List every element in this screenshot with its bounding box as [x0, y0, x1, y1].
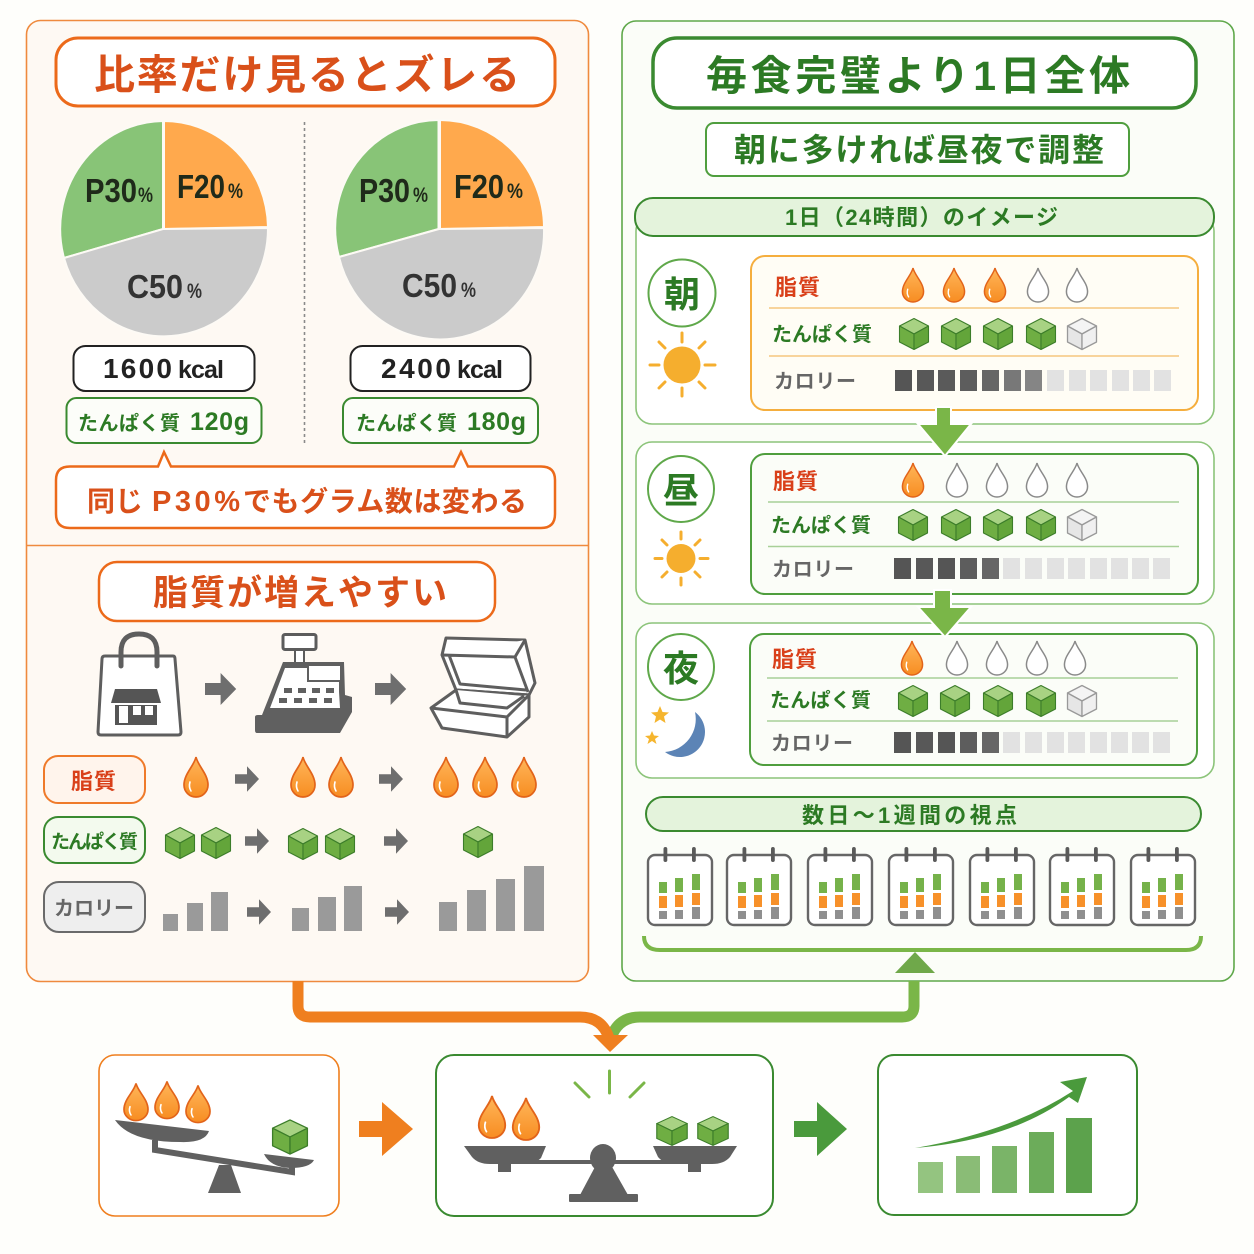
pie chart: 2400 kcal: F20: [454, 168, 504, 205]
panel: whole-day view: [622, 21, 1234, 981]
label: protein 180g: たんぱく質: [356, 412, 457, 435]
heading: whole day over each meal: [653, 38, 1196, 108]
label: protein 120g: [66, 398, 262, 443]
header: days to one week view: [646, 797, 1201, 831]
callout: same P30 differs in grams: でもグラム数は変わる: [243, 485, 527, 517]
panel: growth chart: [878, 1055, 1137, 1215]
card: night intake: カロリー: [771, 733, 853, 755]
pie chart: 1600 kcal: [60, 121, 268, 336]
arrowhead: week to balance: [895, 952, 935, 973]
connector: green path to balance: [611, 981, 914, 1038]
panel: unbalanced scale: [99, 1055, 339, 1216]
pie chart: 2400 kcal: %: [461, 279, 476, 302]
pie chart: 1600 kcal: %: [228, 180, 243, 203]
card: night intake: たんぱく質: [770, 689, 871, 712]
label: 2400 kcal: kcal: [457, 356, 503, 384]
card: morning intake: カロリー: [774, 371, 856, 393]
callout: same P30 differs in grams: P30%: [152, 486, 240, 518]
pie chart: 1600 kcal: %: [138, 184, 153, 207]
label: protein 120g: 120g: [190, 408, 249, 436]
card: noon intake: [751, 454, 1198, 594]
connector: orange path to balance: [298, 981, 628, 1052]
arrow: unbalanced to balanced: [359, 1102, 413, 1156]
arrow: bag to register: [205, 673, 236, 705]
pie chart: 1600 kcal: C50: [127, 268, 183, 305]
fat level: 3 of 5: [902, 268, 1088, 302]
section: night: [636, 623, 1214, 778]
label: 2400 kcal: [350, 346, 530, 391]
panel: balanced scale: [436, 1055, 773, 1216]
label: protein 180g: 180g: [467, 408, 526, 436]
row: protein label: たんぱく質: [51, 831, 138, 853]
calorie level: 5 of 13: [894, 732, 1170, 753]
badge: noon: [648, 456, 714, 522]
header: 24 hour image: [635, 198, 1214, 236]
card: morning intake: 脂質: [775, 275, 820, 300]
pie chart: 1600 kcal: P30: [85, 172, 137, 209]
fat level: 1 of 5: [901, 641, 1086, 675]
fat level: 1 of 5: [902, 463, 1088, 497]
icon: takeout box: [431, 638, 535, 737]
card: morning intake: [751, 256, 1198, 410]
pie chart: 1600 kcal: %: [187, 280, 202, 303]
subheading: adjust at lunch and dinner: 朝に多ければ昼夜で調整: [734, 132, 1104, 168]
callout: same P30 differs in grams: [56, 452, 555, 528]
pie chart: 2400 kcal: P30: [359, 172, 410, 209]
card: noon intake: たんぱく質: [771, 514, 871, 537]
heading: ratio alone misleads: [56, 38, 555, 106]
label: 1600 kcal: [74, 346, 254, 391]
heading: ratio alone misleads: 比率だけ見るとズレる: [94, 52, 520, 98]
arrow: rising trend: [915, 1077, 1087, 1148]
icon: cash register: [255, 634, 352, 733]
icon: store bag: [98, 634, 181, 735]
row: protein cubes decrease: [166, 826, 492, 860]
label: 2400 kcal: 2400: [381, 353, 451, 384]
icons: seven daily calendars: [648, 847, 1195, 925]
icon: sun: [650, 333, 715, 396]
row: calorie label: カロリー: [54, 898, 134, 920]
card: night intake: 脂質: [772, 647, 817, 672]
panel: ratio and convenience food: [26, 20, 588, 982]
label: 1600 kcal: kcal: [178, 356, 224, 384]
bracket: week total: [644, 936, 1201, 950]
arrow: morning to noon: [918, 407, 971, 456]
calorie level: 7 of 13: [895, 370, 1171, 391]
card: night intake: [750, 634, 1197, 765]
protein level: 4 of 5: [900, 318, 1096, 350]
pie chart: 2400 kcal: %: [507, 180, 523, 203]
protein level: 4 of 5: [898, 510, 1096, 540]
row: fat label: [44, 756, 145, 803]
pie chart: 1600 kcal: F20: [177, 168, 225, 205]
section: noon: [636, 442, 1214, 604]
header: days to one week view: 数日～1週間の視点: [802, 803, 1017, 828]
pie chart: 2400 kcal: %: [413, 184, 428, 207]
heading: fat tends to rise: [99, 562, 495, 621]
heading: fat tends to rise: 脂質が増えやすい: [153, 574, 447, 613]
badge: night: 夜: [663, 648, 699, 689]
badge: night: [648, 634, 714, 700]
row: fat drops increase: [184, 757, 536, 797]
calorie level: 5 of 13: [894, 558, 1170, 579]
callout: same P30 differs in grams: 同じ: [87, 486, 143, 517]
pie chart: 2400 kcal: C50: [402, 267, 457, 304]
row: calorie label: [44, 882, 145, 932]
heading: whole day over each meal: 毎食完璧より1日全体: [706, 53, 1130, 99]
badge: morning: 朝: [664, 274, 700, 315]
icon: moon and stars: [645, 706, 705, 757]
protein level: 4 of 5: [898, 686, 1096, 716]
header: 24 hour image: 1日（24時間）のイメージ: [785, 205, 1058, 230]
subheading: adjust at lunch and dinner: [706, 123, 1129, 176]
label: protein 180g: [343, 398, 538, 443]
row: calorie bars increase: [163, 866, 544, 931]
pie chart: 2400 kcal: [335, 120, 544, 339]
section: morning: [635, 198, 1214, 424]
row: protein label: [44, 817, 145, 863]
label: protein 120g: たんぱく質: [78, 412, 180, 435]
card: morning intake: たんぱく質: [772, 323, 872, 346]
row: fat label: 脂質: [71, 769, 116, 794]
arrow: register to box: [375, 673, 406, 705]
card: noon intake: カロリー: [772, 559, 854, 581]
badge: morning: [648, 260, 716, 326]
label: 1600 kcal: 1600: [103, 353, 172, 384]
arrow: noon to night: [918, 590, 971, 637]
card: noon intake: 脂質: [773, 469, 818, 494]
arrow: balanced to growth: [794, 1102, 847, 1156]
icon: small sun: [655, 532, 708, 585]
badge: noon: 昼: [663, 470, 699, 511]
